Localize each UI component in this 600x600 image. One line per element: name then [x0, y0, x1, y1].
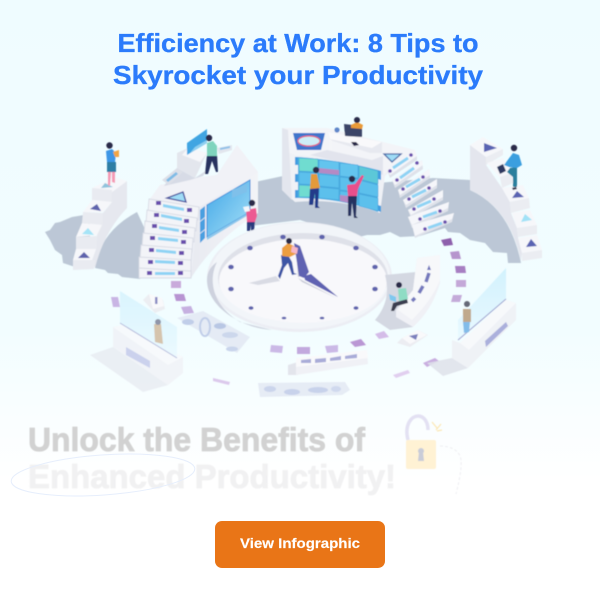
- scribble ellipse: [10, 449, 196, 501]
- faded heading: Unlock the Benefits of: [28, 421, 366, 458]
- outer ring tiles: [111, 238, 466, 385]
- title: Efficiency at Work: 8 Tips to: [118, 28, 478, 58]
- ground shadow: [45, 176, 521, 279]
- desk shadow: [164, 168, 207, 186]
- right stairs: [470, 137, 542, 261]
- person: man pushing hand: [278, 238, 298, 279]
- left building: [139, 129, 258, 278]
- right building stairs: [387, 150, 454, 238]
- icon: open padlock: [406, 416, 461, 494]
- person: orange man at wall: [309, 167, 320, 208]
- blue wall screen: [207, 180, 250, 237]
- button: View Infographic: [240, 535, 360, 551]
- decorated floor panel left: [177, 311, 250, 353]
- minute hand: [294, 243, 309, 278]
- step triangles: [101, 183, 113, 188]
- desk with monitor: [177, 148, 207, 178]
- person: pink woman at wall: [347, 175, 364, 218]
- person: man climbing with bag: [497, 145, 522, 190]
- person seated with curved block: [375, 255, 440, 330]
- clock markers: [228, 235, 378, 319]
- desk: [328, 132, 382, 153]
- bottom block: [288, 350, 368, 375]
- left stairs: [73, 177, 127, 270]
- right building: [282, 117, 454, 238]
- screen wall: [298, 157, 378, 212]
- faded heading: Enhanced Productivity!: [28, 458, 396, 495]
- decorated floor panel bottom: [258, 382, 350, 397]
- stair rows: [139, 199, 199, 278]
- hand shadows: [249, 276, 280, 285]
- person: man at desk: [351, 117, 363, 146]
- right glass display: [427, 268, 516, 376]
- person: woman reading: [243, 200, 257, 231]
- step triangles: [484, 143, 497, 152]
- roof triangle: [167, 192, 186, 202]
- small tile right: [397, 330, 428, 347]
- faded heading: [28, 421, 396, 495]
- clock: [207, 222, 392, 332]
- roof shade under desk: [310, 150, 383, 175]
- hour hand: [304, 274, 338, 297]
- person behind glass: [463, 322, 470, 333]
- small tile left: [143, 294, 165, 313]
- title: [113, 28, 484, 90]
- person: man at monitor: [205, 135, 218, 174]
- person behind glass: [154, 324, 163, 344]
- button: [215, 521, 385, 568]
- roof triangle: [384, 154, 401, 162]
- person: woman with megaphone: [106, 142, 119, 186]
- poster: [293, 133, 325, 150]
- left glass display: [90, 291, 183, 392]
- title: Skyrocket your Productivity: [113, 60, 484, 90]
- wall tabs: [200, 206, 205, 243]
- isometric illustration: [45, 117, 542, 397]
